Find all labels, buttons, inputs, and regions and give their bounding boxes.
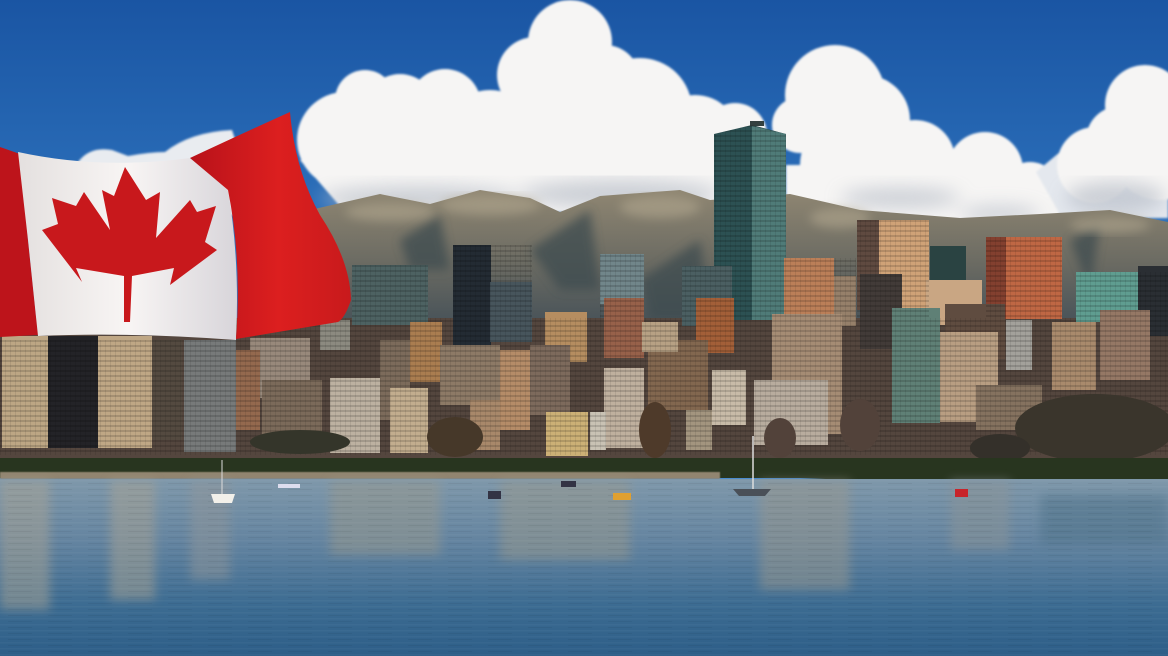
cloud shading xyxy=(320,180,1165,222)
sky xyxy=(0,0,1168,480)
glass tower xyxy=(714,121,786,320)
city base xyxy=(0,318,1168,468)
orange tower right xyxy=(986,237,1062,319)
maple leaf xyxy=(42,167,217,322)
flag left red band xyxy=(0,147,38,337)
lower city blocks xyxy=(772,314,842,434)
flag white centre xyxy=(18,152,237,340)
water xyxy=(0,479,1168,656)
mid buildings xyxy=(1076,272,1140,322)
water reflections xyxy=(0,480,1168,610)
shoreline xyxy=(0,458,1168,485)
buildings xyxy=(2,121,1168,456)
boats xyxy=(211,436,968,503)
trees xyxy=(250,394,1168,462)
water ripples xyxy=(0,480,1168,656)
window texture xyxy=(0,125,1168,455)
Canadian flag xyxy=(0,112,351,340)
flag right red band xyxy=(190,112,351,339)
mountains xyxy=(310,190,1168,340)
tan tower xyxy=(857,220,929,310)
clouds xyxy=(78,0,1168,222)
left towers xyxy=(2,336,48,448)
